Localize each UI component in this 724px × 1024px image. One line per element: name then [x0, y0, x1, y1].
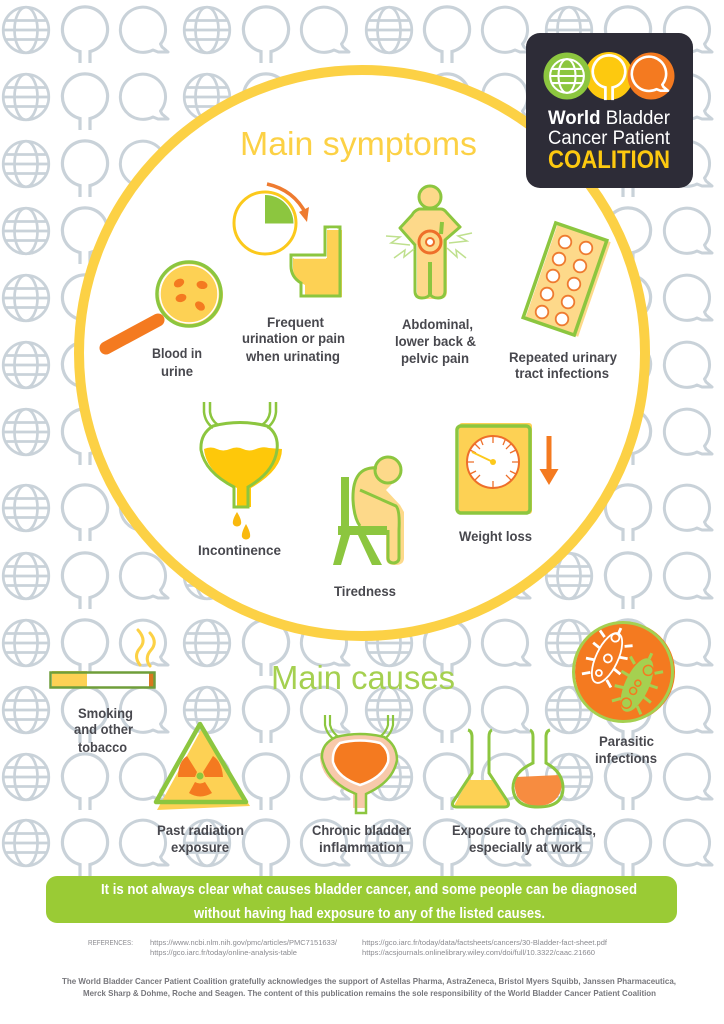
logo: World Bladder Cancer Patient Coalition	[526, 33, 693, 188]
icon: blister pack of pills	[523, 223, 611, 337]
label: frequent urination: urination or pain	[242, 331, 345, 346]
icon: bladder with leaking drops	[201, 402, 282, 539]
label: incontinence: Incontinence	[198, 543, 281, 558]
label: parasitic infections	[595, 734, 657, 766]
label: past radiation exposure	[157, 823, 244, 855]
label: smoking and other tobacco: and other	[74, 722, 134, 737]
icon: inflamed bladder	[320, 715, 397, 813]
label: exposure to chemicals	[452, 823, 596, 855]
label: smoking and other tobacco	[74, 706, 134, 755]
panel: white footer backdrop	[0, 876, 724, 1024]
label: blood in urine	[152, 346, 202, 379]
label: abdominal pain: lower back &	[395, 334, 476, 349]
text block: acknowledgement	[62, 977, 676, 998]
icon: tired person on chair	[333, 457, 404, 565]
text block: references: https://www.ncbi.nlm.nih.gov/pmc/articles/PMC7151633/	[150, 938, 338, 947]
icon: person with abdominal pain	[386, 186, 472, 299]
label: abdominal pain: pelvic pain	[401, 351, 469, 366]
text block: acknowledgement: The World Bladder Cancer Patient Coalition gratefully acknowledges the support of Astellas Pharma, AstraZeneca, Bristol Myers Squibb, Janssen Pharmaceutica,	[62, 977, 676, 986]
label: parasitic infections: Parasitic	[599, 734, 654, 749]
text block: references	[88, 938, 608, 957]
icon: clock and toilet	[234, 184, 342, 297]
icon: radiation warning triangle	[156, 724, 250, 810]
label: chronic bladder inflammation: inflammation	[319, 840, 404, 855]
label: chronic bladder inflammation	[312, 823, 412, 855]
icon: parasites in a circle	[574, 620, 675, 722]
icon: scale with downward arrow	[457, 423, 558, 514]
heading: main causes: Main causes	[271, 659, 455, 696]
text block: references: https://gco.iarc.fr/today/online-analysis-table	[150, 948, 297, 957]
label: smoking and other tobacco: Smoking	[78, 706, 133, 721]
label: frequent urination	[242, 315, 345, 364]
heading: main symptoms: Main symptoms	[240, 125, 477, 162]
label: past radiation exposure: Past radiation	[157, 823, 244, 838]
label: exposure to chemicals: especially at work	[469, 840, 582, 855]
label: repeated urinary tract infections: Repeated urinary	[509, 350, 617, 365]
text block: references: https://acsjournals.onlinelibrary.wiley.com/doi/full/10.3322/caac.21660	[362, 948, 595, 957]
logo: World Bladder Cancer Patient Coalition: Cancer Patient	[548, 128, 671, 149]
label: chronic bladder inflammation: Chronic bladder	[312, 823, 412, 838]
label: parasitic infections: infections	[595, 751, 657, 766]
icon: cigarette and smoke	[50, 630, 154, 688]
label: blood in urine: Blood in	[152, 346, 202, 361]
callout: green note bar: without having had exposure to any of the listed causes.	[193, 906, 545, 922]
icon: magnifying glass over blood	[106, 262, 223, 348]
label: blood in urine: urine	[161, 364, 193, 379]
label: abdominal pain: Abdominal,	[402, 317, 473, 332]
callout: green note bar: It is not always clear what causes bladder cancer, and some people can be diagnosed	[101, 882, 637, 898]
callout: green note bar	[46, 876, 677, 923]
label: smoking and other tobacco: tobacco	[78, 740, 127, 755]
logo: World Bladder Cancer Patient Coalition: World Bladder	[548, 108, 671, 129]
label: repeated urinary tract infections: tract infections	[515, 366, 609, 381]
label: exposure to chemicals: Exposure to chemicals,	[452, 823, 596, 838]
text block: references: https://gco.iarc.fr/today/data/factsheets/cancers/30-Bladder-fact-sheet.pdf	[362, 938, 608, 947]
icon: laboratory flasks	[452, 730, 563, 807]
label: weight loss: Weight loss	[459, 529, 532, 544]
text block: acknowledgement: Merck Sharp & Dohme, Roche and Seagen. The content of this publication remains the sole responsibility of the World Bladder Cancer Patient Coalition	[83, 989, 656, 998]
logo: World Bladder Cancer Patient Coalition: COALITION	[548, 146, 670, 174]
label: repeated urinary tract infections	[509, 350, 617, 381]
text block: references: REFERENCES:	[88, 938, 133, 947]
label: frequent urination: Frequent	[267, 315, 324, 330]
label: abdominal pain	[395, 317, 476, 366]
panel: main symptoms circle	[79, 70, 645, 636]
label: tiredness: Tiredness	[334, 584, 396, 599]
label: frequent urination: when urinating	[245, 349, 340, 364]
label: past radiation exposure: exposure	[171, 840, 229, 855]
